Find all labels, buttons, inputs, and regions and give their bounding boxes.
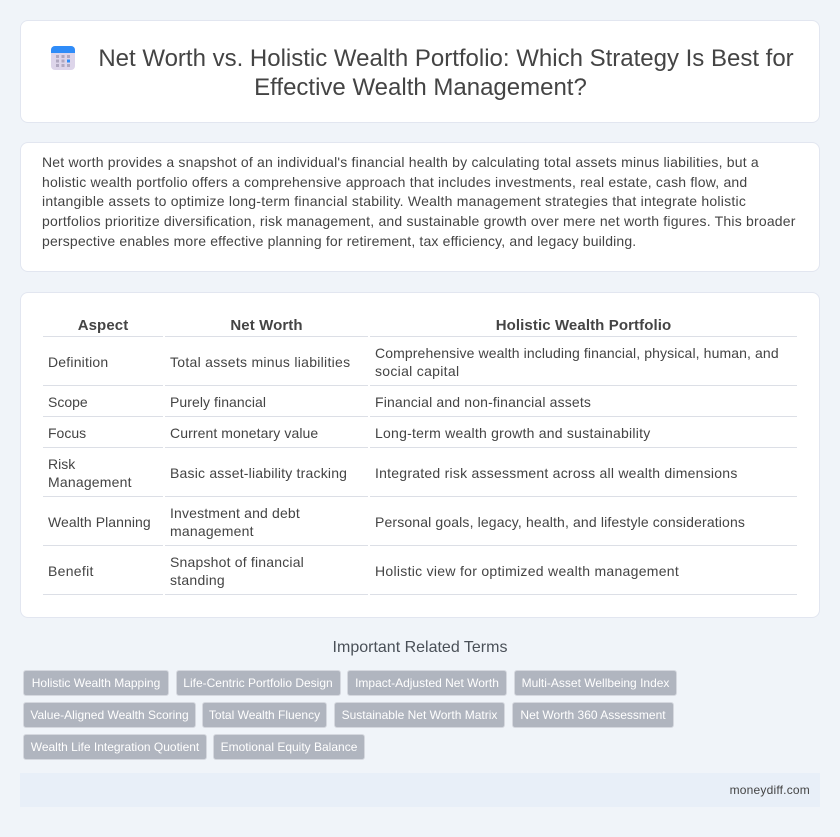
summary text (42, 154, 796, 249)
table header: Aspect (78, 317, 128, 334)
summary text: holistic wealth portfolio offers a comprehensive approach that includes investments, real estate, cash flow, and (42, 174, 747, 190)
row: definition: Comprehensive wealth including financial, physical, human, and (375, 345, 779, 361)
row: definition (48, 345, 779, 379)
summary panel (20, 142, 820, 272)
tag: Multi-Asset Wellbeing Index (522, 676, 669, 690)
row: wealth planning: Wealth Planning (48, 514, 151, 530)
tag (202, 702, 327, 728)
tag: Value-Aligned Wealth Scoring (30, 708, 189, 722)
row: wealth planning: Investment and debt (170, 505, 300, 521)
summary text: perspective enables more effective planning for retirement, tax efficiency, and legacy building. (42, 233, 636, 249)
tag (23, 734, 207, 760)
comparison table panel (20, 292, 820, 618)
tag (514, 670, 677, 696)
tag (23, 702, 196, 728)
row: risk management: Basic asset-liability tracking (170, 465, 347, 481)
title: Net Worth vs. Holistic Wealth Portfolio: Which Strategy Is Best for (98, 45, 794, 72)
comparison table (43, 317, 797, 595)
tag: Wealth Life Integration Quotient (31, 740, 199, 754)
row: benefit (48, 554, 679, 588)
tag: Impact-Adjusted Net Worth (355, 676, 499, 690)
row: risk management: Integrated risk assessment across all wealth dimensions (375, 465, 738, 481)
row: wealth planning (48, 505, 745, 539)
row: focus: Long-term wealth growth and sustainability (375, 425, 650, 441)
tag: Sustainable Net Worth Matrix (342, 708, 497, 722)
tag (334, 702, 505, 728)
icon: calendar (51, 46, 75, 70)
summary text: Net worth provides a snapshot of an individual's financial health by calculating total assets minus liabilities, but a (42, 154, 759, 170)
row: focus (48, 425, 650, 441)
row: benefit: standing (170, 572, 225, 588)
row: risk management (48, 456, 738, 490)
tag: Total Wealth Fluency (209, 708, 320, 722)
row: wealth planning: management (170, 523, 254, 539)
row: scope: Scope (48, 394, 88, 410)
tag: Net Worth 360 Assessment (520, 708, 666, 722)
tag (176, 670, 340, 696)
row: focus: Focus (48, 425, 86, 441)
row: risk management: Management (48, 474, 132, 490)
related term tags (23, 670, 677, 760)
row: benefit: Benefit (48, 563, 94, 579)
row: focus: Current monetary value (170, 425, 318, 441)
row: benefit: Holistic view for optimized wealth management (375, 563, 679, 579)
row: scope: Financial and non-financial assets (375, 394, 591, 410)
tag (347, 670, 507, 696)
row: wealth planning: Personal goals, legacy, health, and lifestyle considerations (375, 514, 745, 530)
footer source: moneydiff.com (730, 783, 810, 797)
tag: Life-Centric Portfolio Design (183, 676, 333, 690)
tag: Emotional Equity Balance (221, 740, 357, 754)
row: definition: Total assets minus liabilities (170, 354, 350, 370)
footer bar (20, 773, 820, 807)
tag (213, 734, 365, 760)
summary text: intangible assets to optimize long-term financial stability. Wealth management strategies that integrate holistic (42, 193, 746, 209)
table header: Net Worth (230, 317, 303, 334)
tag (512, 702, 674, 728)
title (98, 45, 794, 101)
title: Effective Wealth Management? (254, 74, 587, 101)
row: scope (48, 394, 591, 410)
row: benefit: Snapshot of financial (170, 554, 304, 570)
header panel (20, 20, 820, 123)
row: risk management: Risk (48, 456, 75, 472)
tag (23, 670, 169, 696)
row: scope: Purely financial (170, 394, 266, 410)
row: definition: social capital (375, 363, 459, 379)
tag: Holistic Wealth Mapping (32, 676, 160, 690)
related terms heading: Important Related Terms (333, 639, 507, 656)
summary text: portfolios prioritize diversification, risk management, and sustainable growth over mere net worth figures. This broader (42, 213, 796, 229)
row: definition: Definition (48, 354, 108, 370)
table header (78, 317, 671, 334)
table header: Holistic Wealth Portfolio (496, 317, 671, 334)
